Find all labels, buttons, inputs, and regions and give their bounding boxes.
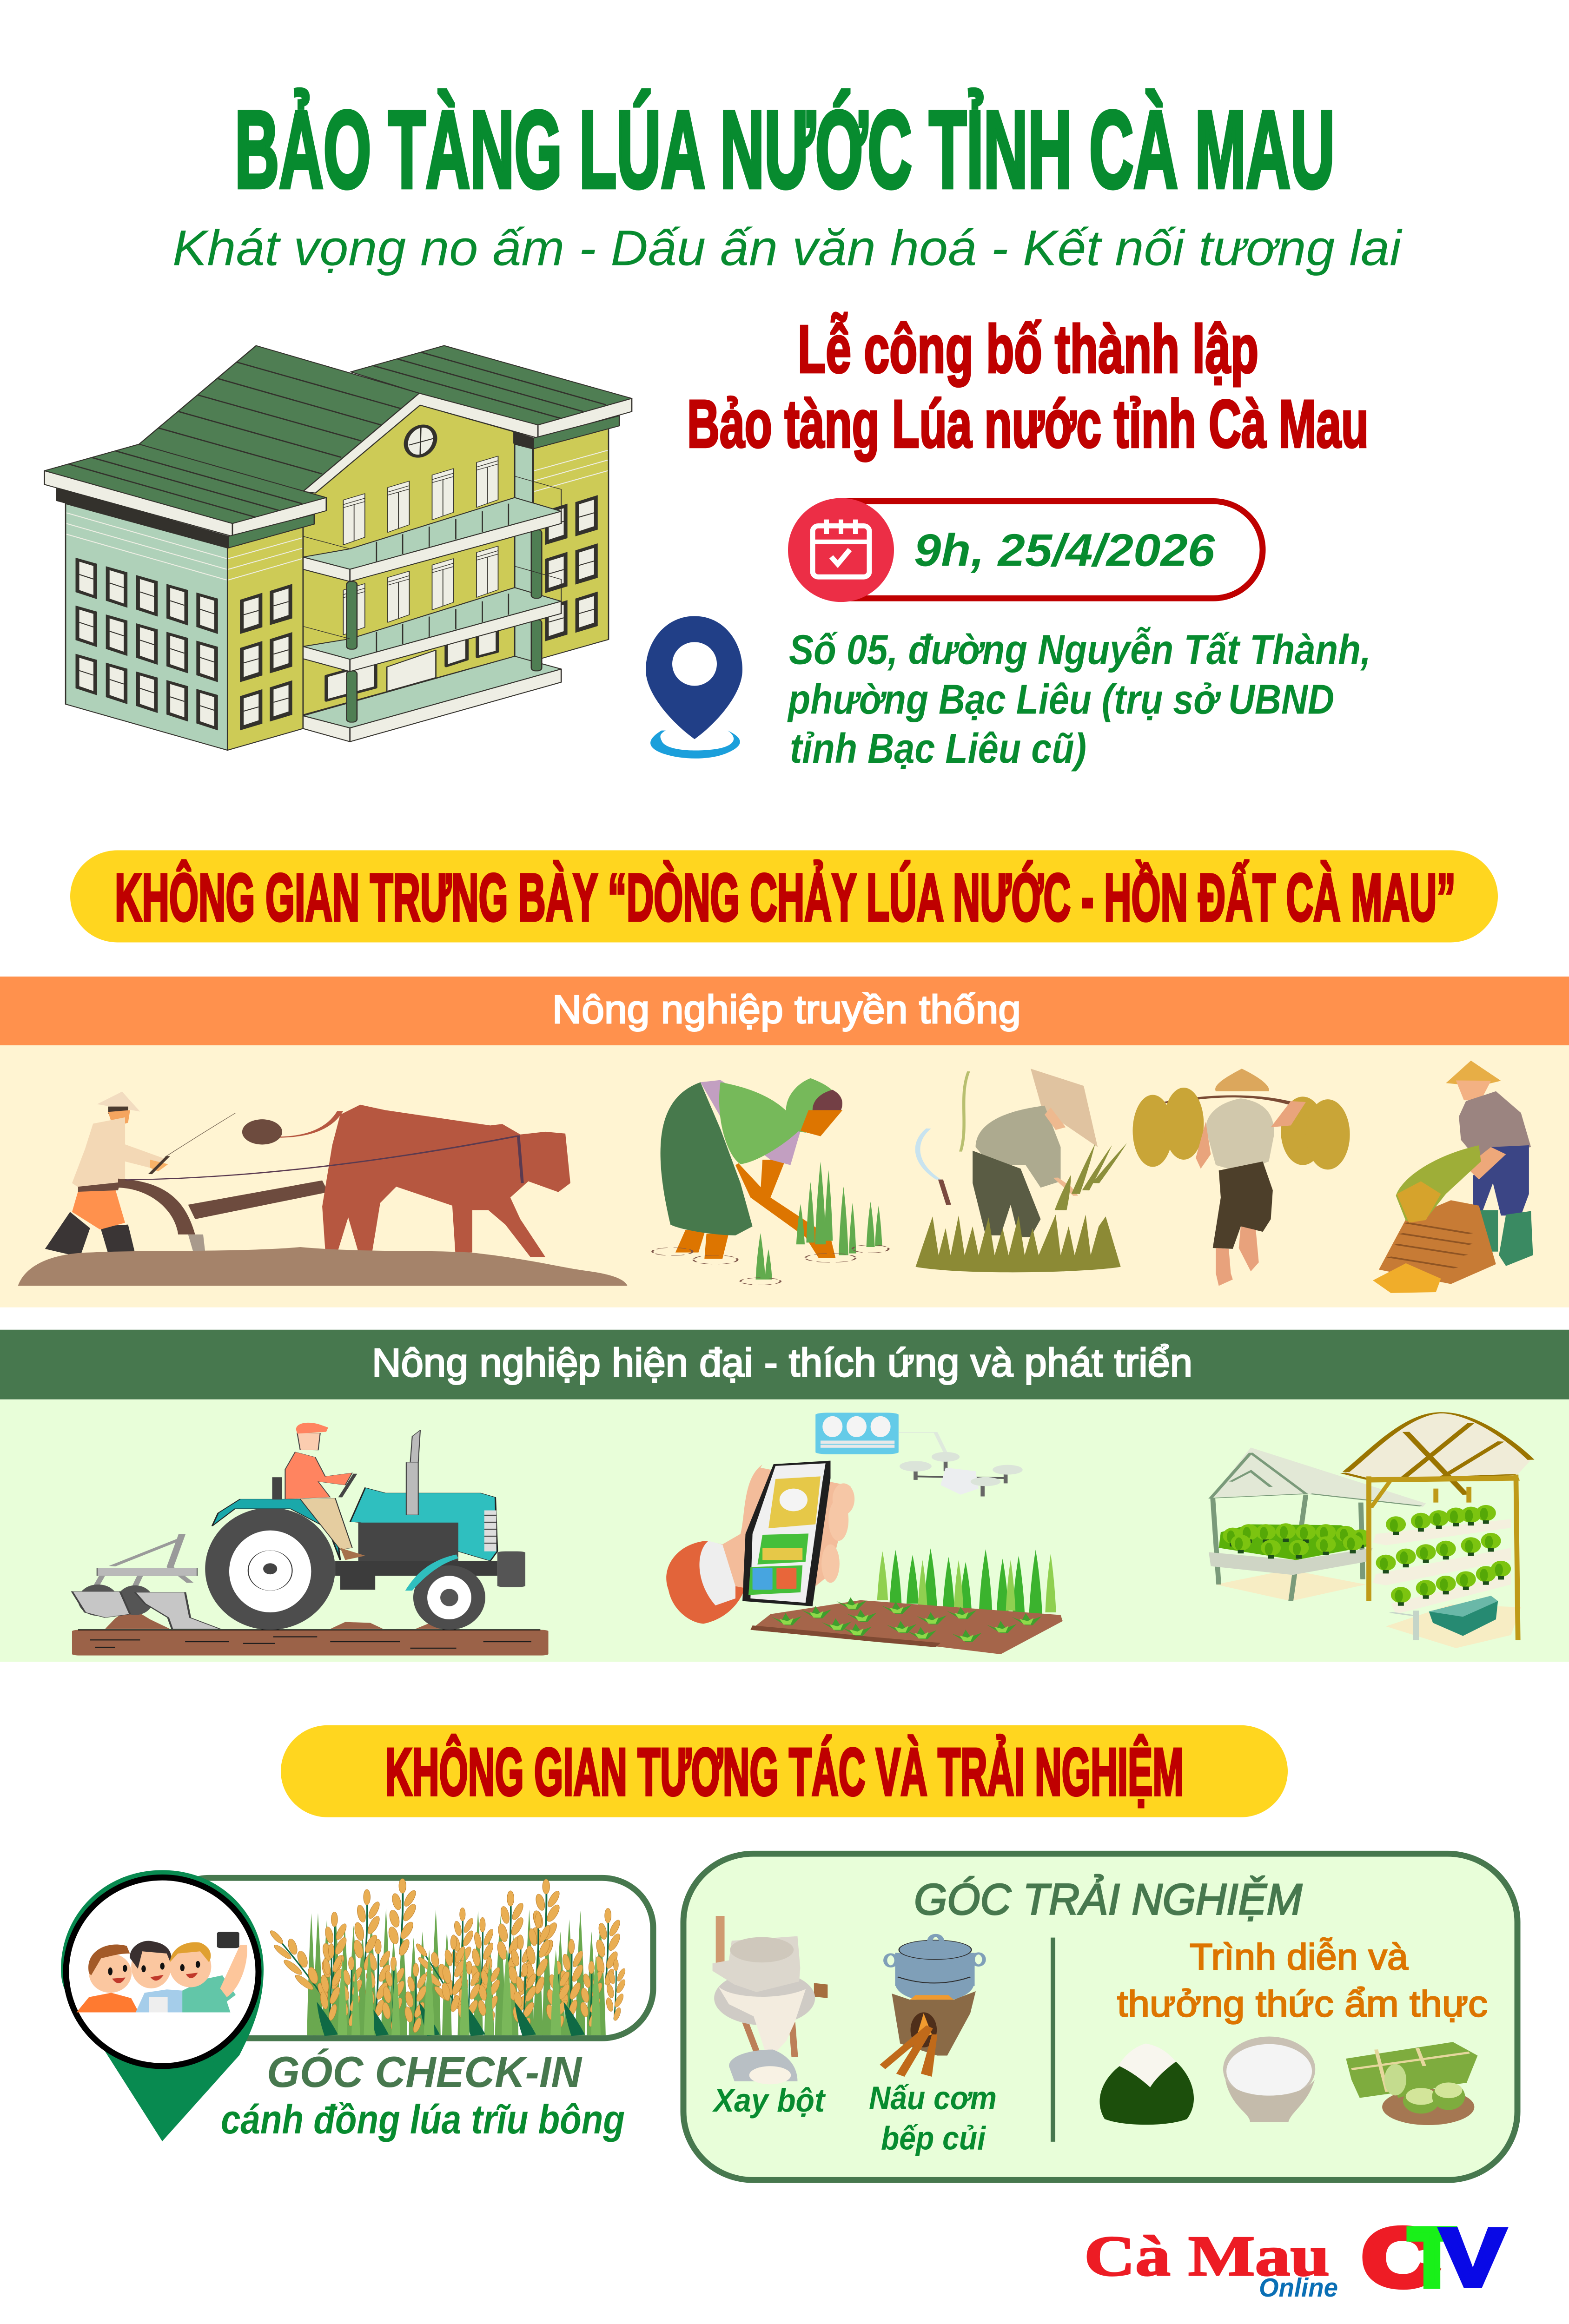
illustration: man carrying rice [1133,1069,1350,1286]
panel: check-in corner [158,1878,653,2038]
panel: modern agriculture illustrations [0,1400,1569,1662]
label: food demonstration: thưởng thức ẩm thực [1117,1983,1488,2024]
date text: 9h, 25/4/2026 [914,525,1215,575]
label: food demonstration: Trình diễn và [1190,1936,1409,1977]
logo: Cà Mau Online: Online [1259,2273,1338,2303]
label: wood-fired rice: Nấu cơm [869,2080,997,2117]
illustration: tractor [72,1423,549,1656]
panel: traditional agriculture illustrations [0,1045,1569,1307]
logo: CTV: C [1362,2212,1439,2303]
illustration: sticky rice, bowl, rice cake [1099,2037,1477,2125]
label: wood-fired rice: bếp củi [881,2120,986,2157]
label: food demonstration [1117,1936,1488,2024]
band: traditional agriculture: Nông nghiệp truyền thống [552,988,1021,1032]
address: tỉnh Bạc Liêu cũ) [790,726,1086,772]
logo: Cà Mau Online: Cà Mau [1084,2224,1330,2288]
check-in heading: GÓC CHECK-IN [267,2048,583,2097]
illustration: rice field [257,1879,627,2036]
illustration: pot on wood stove [880,1935,984,2077]
heading: ceremony [687,311,1369,462]
experience heading: GÓC TRẢI NGHIỆM [914,1875,1303,1924]
illustration: smartphone, drone and seedlings [666,1413,1063,1654]
illustration: stone mill [713,1916,828,2084]
logo: Cà Mau Online [1084,2224,1338,2303]
band: modern agriculture [0,1330,1569,1400]
label: wood-fired rice [869,2080,997,2157]
logo: CTV: T [1409,2212,1455,2303]
label: grind flour: Xay bột [712,2082,826,2119]
divider [1051,1938,1055,2142]
illustration: harvesting man with sickle [915,1069,1131,1272]
band: modern agriculture: Nông nghiệp hiện đại - thích ứng và phát triển [372,1341,1192,1385]
illustration: farmer ploughing with ox [18,1091,628,1286]
address: phường Bạc Liêu (trụ sở UBND [787,676,1334,723]
illustration: woman threshing rice [1373,1061,1533,1293]
subtitle: Khát vọng no ấm - Dấu ấn văn hoá - Kết nối tương lai [172,220,1403,276]
icon: museum building [45,346,632,750]
address [787,627,1371,772]
band: traditional agriculture [0,977,1569,1045]
check-in caption: cánh đồng lúa trĩu bông [221,2096,625,2142]
section banner: interactive space [281,1725,1288,1817]
icon: map pin with selfie group [61,1870,264,2141]
panel: experience corner [683,1854,1517,2180]
heading: ceremony: Lễ công bố thành lập [798,311,1258,387]
icon: location pin [646,616,742,759]
illustration: three friends taking a selfie [77,1932,247,2013]
logo: CTV: V [1440,2212,1505,2303]
date pill [788,498,1263,602]
address: Số 05, đường Nguyễn Tất Thành, [789,627,1371,673]
illustration: woman transplanting rice [652,1078,888,1285]
icon: calendar [788,498,894,602]
logo: CTV [1362,2212,1505,2303]
illustration: greenhouse and hydroponics [1209,1413,1531,1648]
